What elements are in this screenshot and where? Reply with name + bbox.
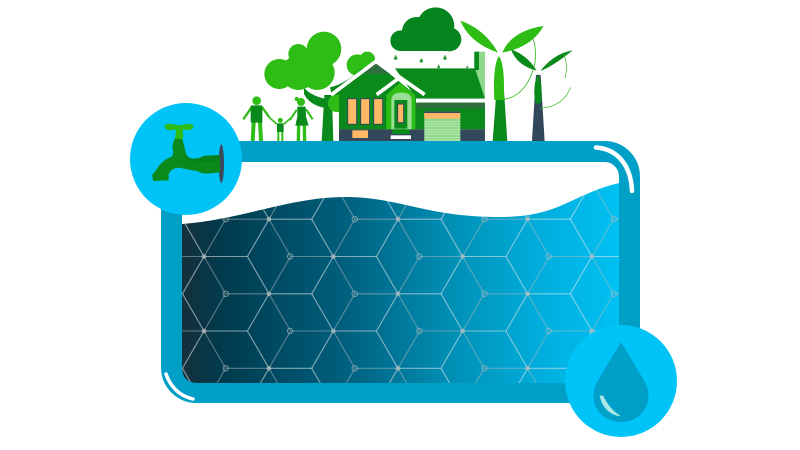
panel: tank frame [172, 152, 630, 392]
garage [424, 111, 460, 141]
windows [348, 99, 383, 138]
tree [264, 32, 375, 141]
icon: water drop circle [565, 325, 677, 437]
drop highlight [600, 396, 620, 416]
water body with hexagon grid [182, 183, 619, 383]
man [243, 96, 269, 141]
rain cloud [390, 7, 469, 68]
frame highlight: bottom left [166, 374, 193, 399]
frame highlight: top right [596, 148, 632, 191]
base [339, 129, 485, 141]
infographic canvas [130, 7, 677, 437]
front gable wall [339, 63, 416, 129]
water drop [594, 342, 648, 422]
roof lines [331, 61, 485, 101]
large wind turbine [460, 21, 544, 141]
illustration: community scene [243, 7, 573, 141]
house wall garage side [416, 103, 485, 129]
woman [290, 97, 313, 141]
hexagon network pattern [182, 190, 619, 383]
chimney [474, 52, 485, 98]
rain drops [394, 55, 469, 68]
faucet [152, 124, 224, 183]
house [331, 52, 485, 141]
porch and door [386, 83, 415, 139]
child [269, 117, 292, 141]
family [243, 96, 313, 141]
small wind turbine [511, 49, 573, 141]
back roof [395, 68, 485, 99]
icon: faucet circle [130, 103, 242, 215]
